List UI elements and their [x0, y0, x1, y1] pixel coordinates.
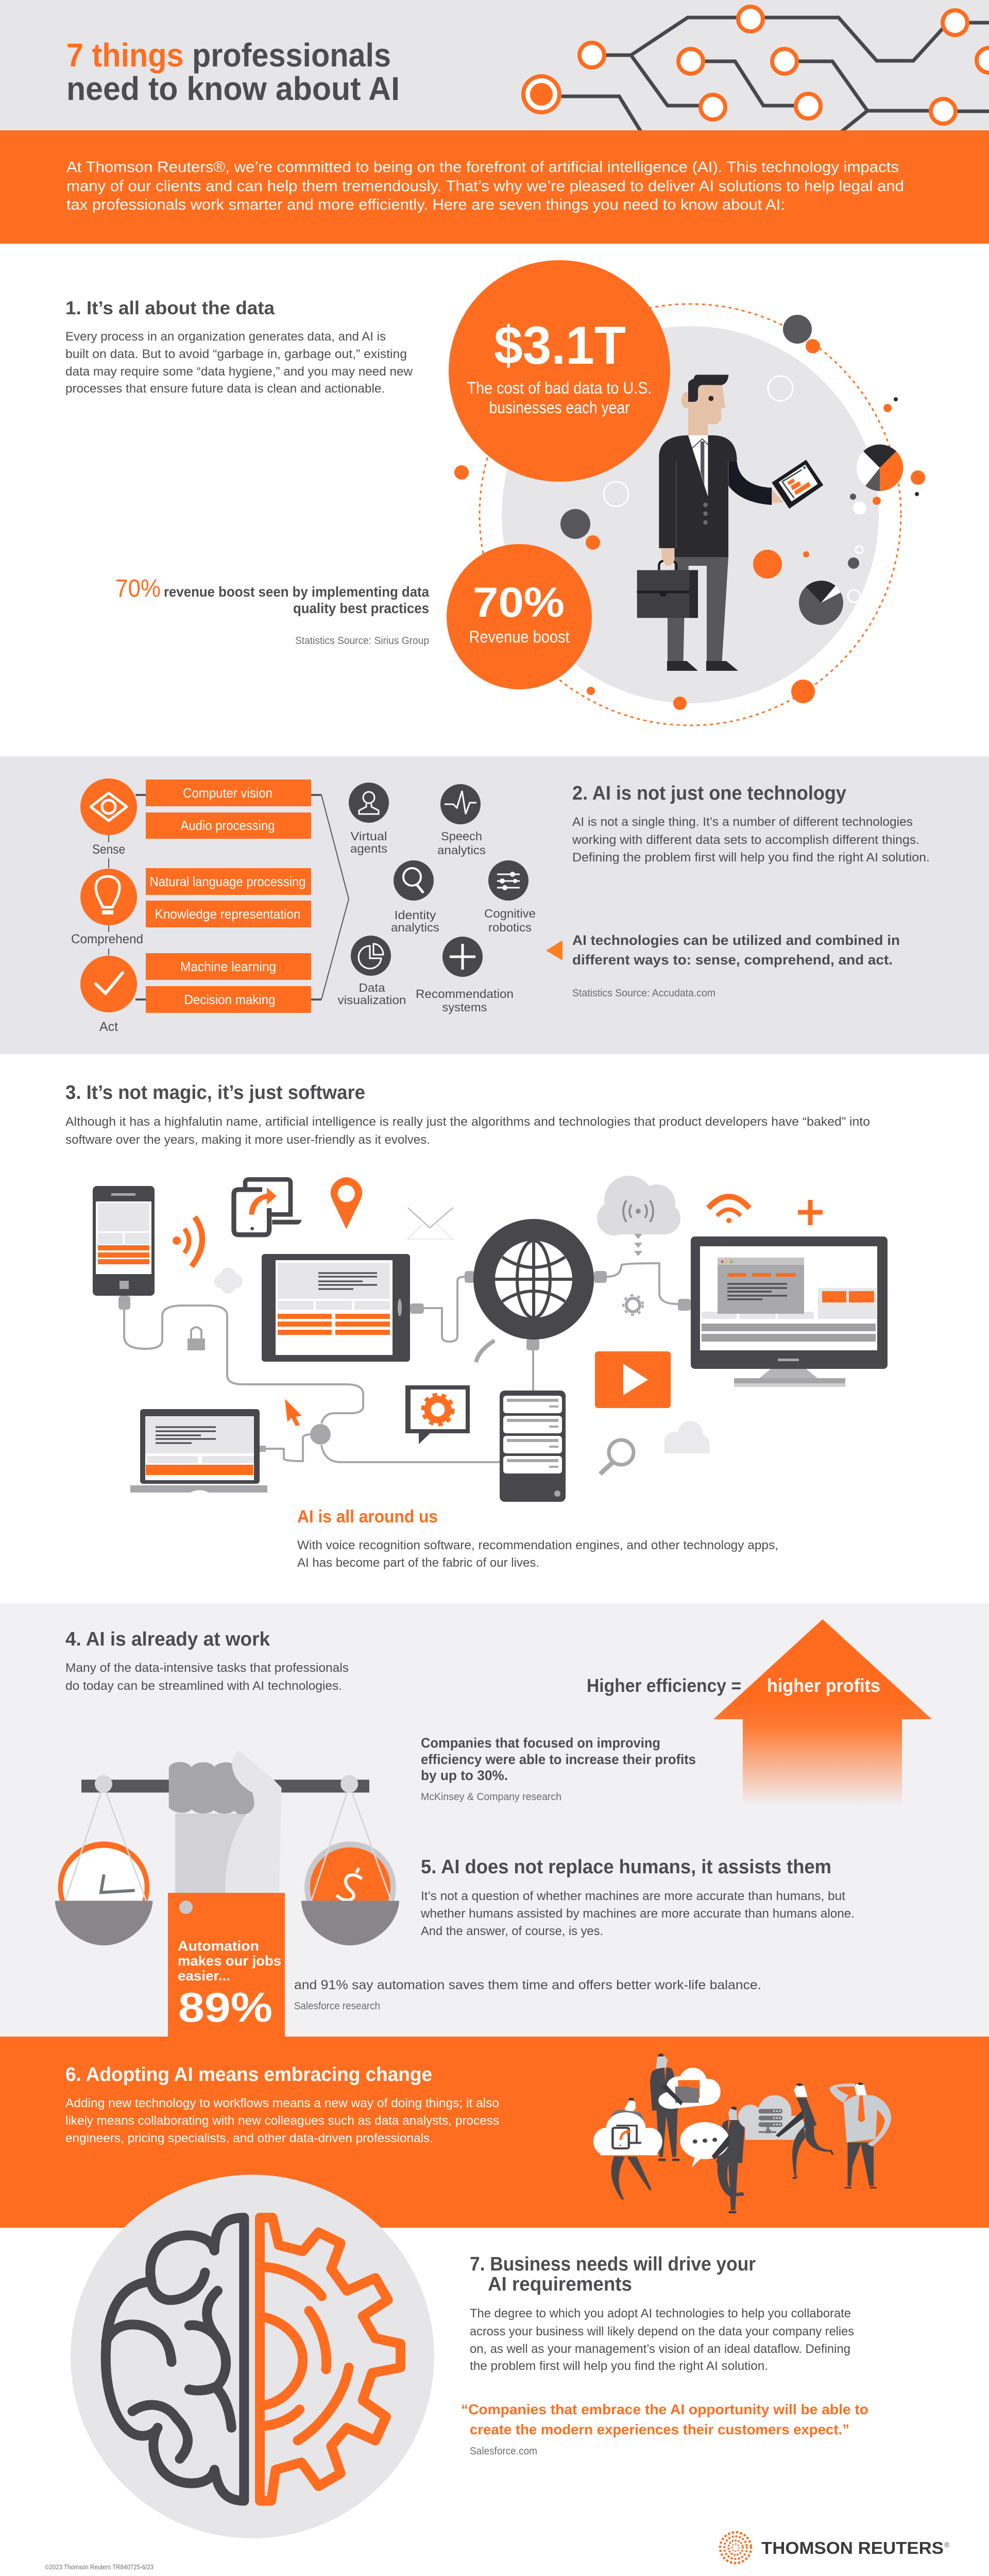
illustration: data backdrop: [454, 304, 925, 725]
icon: desktop monitor: [691, 1236, 888, 1387]
labels: technology icons: Data: [359, 981, 385, 994]
icon: recommendation systems: [442, 937, 483, 977]
figure: man with server cloud: [738, 2083, 834, 2212]
text: automation note: [294, 1978, 761, 2012]
icon: comprehend bulb: [80, 869, 137, 925]
arrow: callout pointer: [546, 940, 562, 960]
arrows: download: [634, 1234, 642, 1256]
panel: section 3: [65, 1082, 888, 1570]
callout: 70% revenue boost: revenue boost seen by implementing data: [164, 584, 429, 600]
stat circle: $3.1T: businesses each year: [489, 398, 630, 417]
callout: efficiency stat: Companies that focused on improving: [421, 1735, 660, 1751]
callout: quote: create the modern experiences their customers expect.”: [470, 2421, 849, 2437]
text block: section 7: [470, 2307, 854, 2373]
plugs and cable node: [118, 1271, 691, 1452]
heading: section 2: 2. AI is not just one technology: [572, 783, 846, 804]
logo: Thomson Reuters: [720, 2532, 950, 2563]
icon: play button: [595, 1351, 671, 1408]
icon: identity analytics: [394, 860, 434, 901]
text block: section 7: on, as well as your management’s vision of an ideal dataflow. Defining: [470, 2342, 850, 2356]
text block: section 6: engineers, pricing specialists, and other data-driven professionals.: [65, 2131, 433, 2145]
icon: virtual agents: [349, 783, 389, 823]
callout: section 2: different ways to: sense, comprehend, and act.: [572, 952, 893, 968]
text block: section 7: the problem first will help you find the right AI solution.: [470, 2359, 768, 2373]
heading: section 5: 5. AI does not replace humans, it assists them: [421, 1856, 831, 1878]
icon: data visualization: [351, 936, 391, 976]
callout: section 2: [572, 933, 900, 999]
connector lines: [109, 795, 349, 999]
labels: technology icons: Cognitive: [484, 907, 536, 920]
panel: intro: [0, 130, 989, 244]
figure: man with speech bubble: [680, 2107, 744, 2213]
orange boxes: technologies: [146, 779, 311, 1013]
heading: section 7: 7. Business needs will drive your: [470, 2253, 756, 2275]
icon: server: [500, 1391, 566, 1502]
text block: section 2: working with different data sets to accomplish different things.: [572, 833, 919, 847]
text block: section 2: Defining the problem first will help you find the right AI solution.: [572, 851, 930, 865]
text block: section 3: software over the years, making it more user-friendly as it evolves.: [65, 1133, 430, 1147]
icon: signal cloud: [597, 1176, 680, 1235]
orange boxes: technologies: Audio processing: [180, 818, 275, 833]
text block: section 4: Many of the data-intensive tasks that professionals: [65, 1661, 349, 1675]
heading: section 1: 1. It’s all about the data: [65, 297, 275, 318]
text block: section 2: [572, 815, 930, 865]
callout: automation 89%: 89%: [178, 1985, 272, 2031]
text block: section 1: built on data. But to avoid “garbage in, garbage out,” existing: [65, 347, 407, 361]
figure: man carrying devices cloud: [593, 2098, 662, 2200]
icon: magnifier: [600, 1440, 634, 1474]
text block: section 2: AI is not a single thing. It’s a number of different technologies: [572, 815, 913, 829]
panel: sections 4 and 5: [0, 1603, 989, 2037]
panel: intro: At Thomson Reuters®, we’re committed to being on the forefront of artificial intelligence (AI). This technology impacts: [66, 159, 899, 176]
callout: efficiency stat: [421, 1735, 696, 1803]
text: higher efficiency: Higher efficiency =: [587, 1675, 741, 1696]
icon: dollar: [304, 1841, 396, 1901]
icon: act check: [80, 956, 137, 1012]
callout: automation 89%: [168, 1893, 285, 2037]
stat circle: $3.1T: $3.1T: [494, 316, 626, 376]
orange boxes: technologies: Knowledge representation: [155, 906, 301, 922]
labels: technology icons: Virtual: [350, 829, 387, 843]
figure: man thinking: [829, 2082, 891, 2189]
orange boxes: technologies: Decision making: [184, 992, 275, 1007]
icon: globe: [473, 1219, 594, 1340]
labels: technology icons: agents: [350, 842, 387, 855]
labels: technology icons: visualization: [338, 993, 406, 1007]
panel: section 2: [0, 756, 989, 1054]
icon: wifi: [708, 1196, 749, 1223]
callout: 70% revenue boost: [115, 575, 429, 647]
callout: 70% revenue boost: Statistics Source: Sirius Group: [295, 635, 429, 647]
callout: AI is all around us: AI is all around us: [297, 1507, 438, 1527]
stat circle: 70%: Revenue boost: [469, 628, 570, 646]
text block: section 5: [420, 1889, 855, 1938]
title: 7 things professionals: [66, 37, 391, 74]
text: automation note: and 91% say automation saves them time and offers better work-life balance.: [294, 1978, 761, 1992]
text block: section 6: Adding new technology to workflows means a new way of doing things; it also: [65, 2096, 499, 2110]
labels: sense comprehend act: Act: [99, 1020, 118, 1034]
icon: gear speech bubble: [405, 1385, 470, 1444]
footer: copyright: ©2023 Thomson Reuters TR840725-6/23: [45, 2563, 154, 2571]
icon: signal waves: [173, 1217, 202, 1266]
labels: technology icons: analytics: [437, 843, 486, 857]
callout: automation 89%: makes our jobs: [178, 1953, 281, 1969]
illustration: balance scale: [55, 1751, 399, 1945]
labels: technology icons: analytics: [391, 921, 439, 934]
callout: AI is all around us: With voice recognition software, recommendation engines, and other technology apps,: [297, 1538, 778, 1552]
panel: section 6: [0, 2037, 989, 2228]
callout: section 2: Statistics Source: Accudata.com: [572, 988, 715, 999]
icon: speech analytics: [440, 784, 481, 824]
chart: pie icon upper: [857, 445, 903, 491]
icon: sense eye: [80, 778, 137, 835]
panel: section 1: [65, 260, 925, 725]
text block: section 6: likely means collaborating with new colleagues such as data analysts, process: [65, 2114, 499, 2128]
orange boxes: technologies: Computer vision: [183, 785, 272, 801]
labels: technology icons: Identity: [395, 908, 436, 922]
title: need to know about AI: [66, 70, 400, 107]
text block: section 5: whether humans assisted by machines are more accurate than humans alone.: [420, 1907, 855, 1921]
icon: small gear: [623, 1295, 643, 1315]
orange boxes: technologies: Machine learning: [180, 959, 276, 974]
callout: AI is all around us: AI has become part of the fabric of our lives.: [297, 1556, 539, 1570]
panel: section 7: [461, 2253, 868, 2457]
text block: section 4: [65, 1661, 349, 1693]
logo: Thomson Reuters: THOMSON REUTERS: [761, 2538, 944, 2557]
text block: section 5: And the answer, of course, is yes.: [421, 1924, 603, 1938]
callout: efficiency stat: efficiency were able to increase their profits: [421, 1752, 696, 1767]
icon: padlock: [187, 1327, 205, 1350]
chart: pie icon lower: [799, 581, 843, 625]
text block: section 4: do today can be streamlined with AI technologies.: [65, 1679, 342, 1693]
icon: cursor: [285, 1399, 302, 1426]
text block: section 3: [65, 1115, 870, 1147]
callout: automation 89%: easier...: [178, 1968, 230, 1984]
panel: header: [0, 0, 989, 134]
icon: cognitive robotics: [488, 860, 528, 901]
callout: quote: “Companies that embrace the AI opportunity will be able to: [461, 2401, 868, 2417]
callout: efficiency stat: McKinsey & Company research: [421, 1791, 561, 1803]
labels: technology icons: robotics: [488, 921, 532, 934]
figure: man with folder cloud: [650, 2054, 721, 2161]
heading: section 7: [470, 2253, 756, 2295]
heading: section 4: 4. AI is already at work: [65, 1629, 270, 1650]
text block: section 5: It’s not a question of whether machines are more accurate than humans, but: [421, 1889, 845, 1903]
text block: section 1: data may require some “data hygiene,” and you may need new: [65, 365, 413, 379]
heading: section 3: 3. It’s not magic, it’s just software: [65, 1082, 365, 1104]
callout: quote: [461, 2401, 868, 2457]
icon: cloud small: [214, 1267, 243, 1294]
circuit decoration: [523, 7, 989, 134]
icon: location pin: [331, 1177, 362, 1229]
network cables: [124, 1263, 678, 1462]
text block: section 1: Every process in an organization generates data, and AI is: [65, 330, 386, 344]
icon: cloud light: [664, 1421, 710, 1453]
labels: technology icons: Speech: [441, 829, 482, 843]
icon: laptop: [130, 1409, 267, 1493]
labels: sense comprehend act: [71, 842, 143, 1034]
callout: AI is all around us: [297, 1507, 778, 1570]
icon: synced devices: [234, 1179, 302, 1235]
labels: technology icons: [338, 829, 536, 1014]
labels: sense comprehend act: Comprehend: [71, 932, 143, 946]
callout: 70% revenue boost: 70%: [115, 575, 161, 602]
icon: clock: [58, 1841, 149, 1901]
text block: section 6: [65, 2096, 499, 2145]
stat circle: 70%: 70%: [473, 579, 565, 626]
labels: technology icons: Recommendation: [416, 987, 514, 1001]
stat circle: $3.1T: [449, 260, 670, 482]
icon: brain and gear: [71, 2175, 434, 2538]
labels: technology icons: systems: [442, 1001, 487, 1014]
callout: automation 89%: Automation: [178, 1938, 259, 1954]
icon: envelope: [407, 1208, 453, 1239]
icon: tablet: [262, 1254, 410, 1362]
icon: plus: [798, 1200, 823, 1225]
logo: Thomson Reuters: ®: [944, 2540, 950, 2549]
callout: efficiency stat: by up to 30%.: [421, 1768, 508, 1783]
stat circle: 70%: [447, 544, 592, 689]
text block: section 3: Although it has a highfalutin name, artificial intelligence is really just the algorithms and technologies that product developers have “baked” into: [65, 1115, 870, 1129]
text block: section 7: The degree to which you adopt AI technologies to help you collaborate: [470, 2307, 851, 2320]
icon: phone handset: [476, 1341, 494, 1362]
panel: intro: tax professionals work smarter and more efficiently. Here are seven things you need to know about AI:: [66, 196, 785, 213]
text block: section 1: processes that ensure future data is clean and actionable.: [65, 382, 385, 396]
text block: section 1: [65, 330, 413, 396]
callout: section 2: AI technologies can be utilized and combined in: [572, 933, 900, 948]
stat circle: $3.1T: The cost of bad data to U.S.: [467, 379, 652, 397]
title: [66, 37, 400, 107]
orange boxes: technologies: Natural language processing: [149, 874, 306, 889]
illustration: businessman with tablet: [637, 375, 823, 671]
heading: section 6: 6. Adopting AI means embracing change: [65, 2064, 432, 2086]
panel: intro: many of our clients and can help them tremendously. That’s why we’re pleased to deliver AI solutions to help legal and: [66, 178, 904, 195]
arrow: higher profits: [713, 1619, 932, 1806]
arrow: higher profits: higher profits: [767, 1675, 880, 1696]
heading: section 7: AI requirements: [488, 2274, 632, 2295]
callout: quote: Salesforce.com: [470, 2446, 537, 2457]
illustration: collaborating colleagues: [593, 2054, 891, 2213]
text block: section 7: across your business will likely depend on the data your company relies: [470, 2325, 854, 2338]
icon: smartphone: [93, 1186, 155, 1296]
callout: 70% revenue boost: quality best practices: [293, 600, 429, 616]
text: automation note: Salesforce research: [294, 2001, 380, 2012]
labels: sense comprehend act: Sense: [92, 842, 125, 857]
